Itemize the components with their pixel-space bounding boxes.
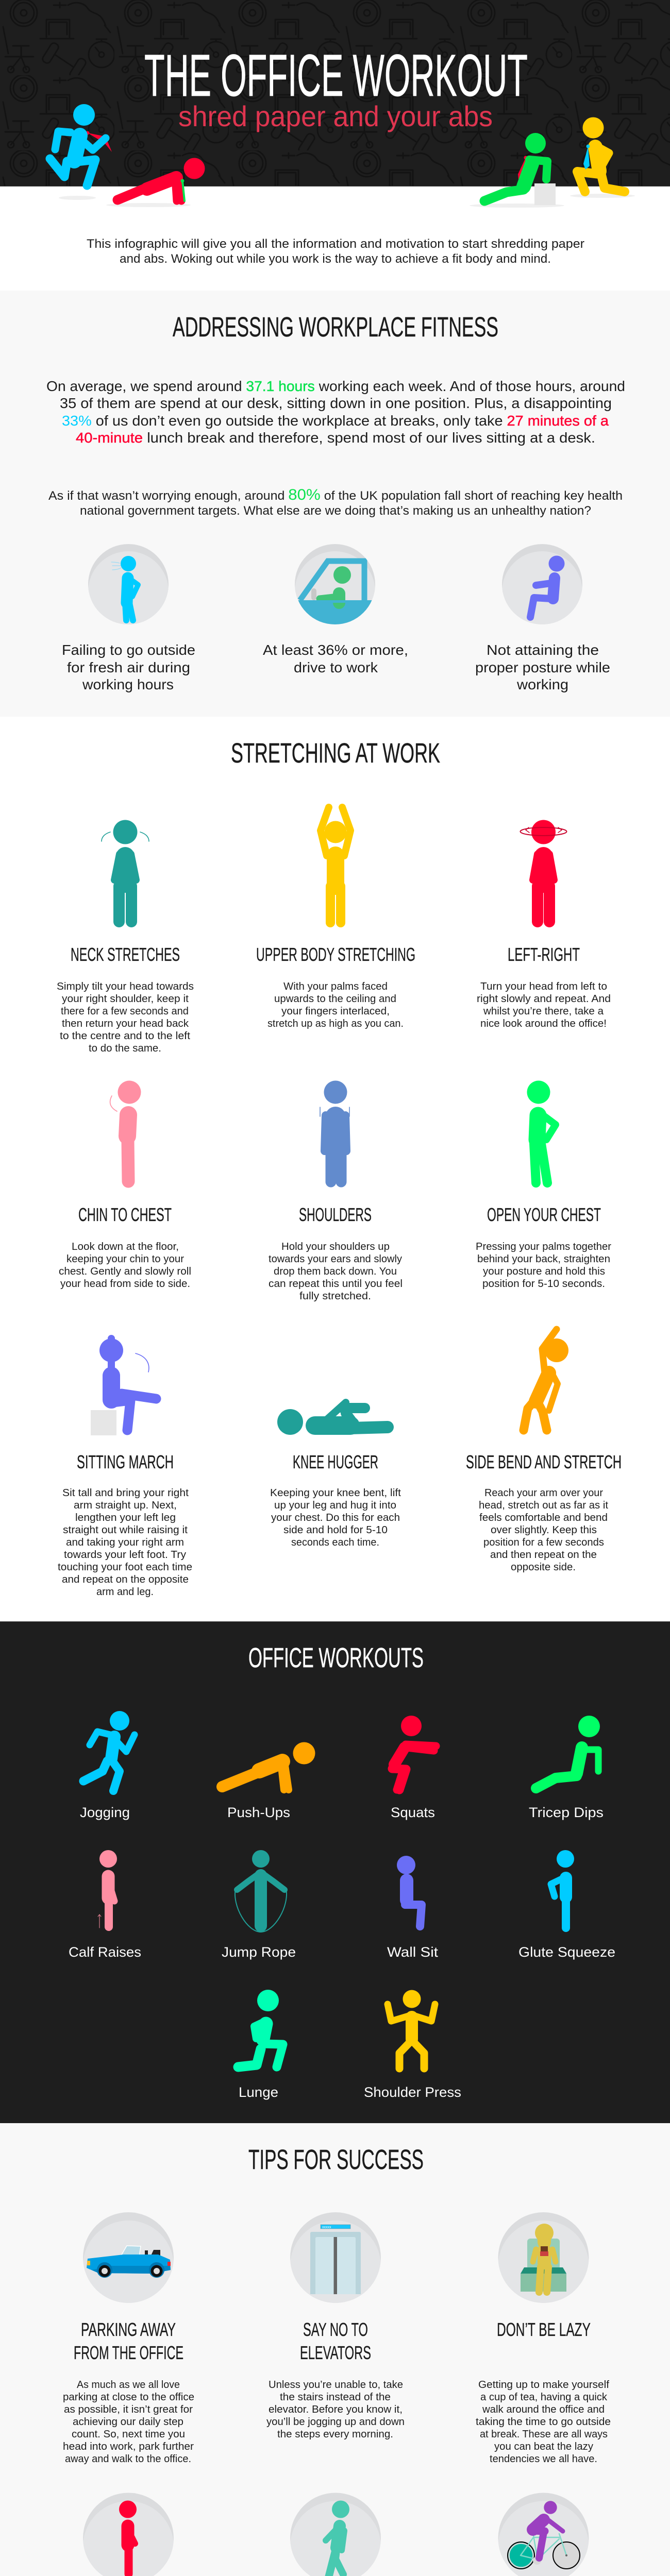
description: Keeping your knee bent, lift [270,1487,401,1499]
caption: drive to work [263,642,408,675]
icon: wall sit [397,1856,422,1926]
description: up your leg and hug it into [274,1500,396,1511]
card: chin to chest [59,1081,191,1290]
description: over slightly. Keep this [491,1524,597,1536]
description: to the centre and to the left [60,1030,190,1042]
card: open your chest [476,1081,611,1290]
icon: open chest figure [527,1081,556,1183]
icon: tricep dips [536,1716,600,1788]
text block: statistics paragraph: 40-minute lunch break and therefore, spend most of our lives sitting at a desk. [76,430,595,446]
description: feels comfortable and bend [479,1512,608,1523]
title: FROM THE OFFICE [74,2342,183,2363]
card: upper body stretching [256,807,415,1029]
description: then return your head back [62,1018,189,1029]
description: towards your ears and slowly [269,1253,402,1265]
caption: posture: Not attaining the [487,642,599,658]
figure: running man [50,104,112,200]
text block: UK population paragraph: national government targets. What else are we doing that’s making us an unhealthy nation? [80,504,591,518]
text block: UK population paragraph: As if that wasn’t worrying enough, around 80% of the UK population fall short of reaching key health [48,486,623,503]
description [59,1241,191,1290]
figure: push-up man [106,158,205,207]
label: Glute Squeeze [518,1944,615,1960]
description: a cup of tea, having a quick [480,2392,608,2403]
title: OPEN YOUR CHEST [487,1204,601,1225]
description [476,1241,611,1290]
card: don't be lazy [476,2212,611,2465]
icon: shoulder press [388,1990,435,2069]
figure: tricep dip man [470,133,564,208]
description: fully stretched. [299,1291,371,1302]
icon: knee hugger figure [277,1402,388,1435]
description: chest. Gently and slowly roll [59,1266,191,1277]
icon: person eating on sofa [498,2212,589,2311]
description: at break. These are all ways [480,2429,608,2440]
description: arm and leg. [96,1586,154,1598]
icon: elevator [290,2212,381,2311]
label: Jump Rope [222,1944,296,1960]
description [267,981,404,1029]
description: Reach your arm over your [484,1487,603,1499]
caption: posture: proper posture while [475,659,610,675]
panel: header banner [0,0,670,208]
text block: statistics paragraph: On average, we spend around 37.1 hours working each week. And of those hours, around [46,378,625,394]
text block: statistics paragraph [46,378,625,446]
description: Turn your head from left to [480,981,607,992]
title: CHIN TO CHEST [78,1204,172,1225]
title: PARKING AWAY [81,2319,176,2340]
icon: blue car [83,2212,174,2311]
title [74,2319,183,2363]
heading: TIPS FOR SUCCESS [248,2144,424,2175]
description: head into work, park further [63,2441,194,2452]
panel: office workouts [0,1621,670,2123]
description: Simply tilt your head towards [57,981,194,992]
caption: failing to go outside: Failing to go outside [62,642,195,658]
label: Jogging [80,1805,130,1820]
icon: glute squeeze [551,1850,574,1928]
card: say no to elevators [266,2212,405,2440]
label: Calf Raises [69,1944,141,1960]
description: parking at close to the office [63,2392,194,2403]
description: lengthen your left leg [75,1512,176,1523]
card: neck stretches [57,820,194,1054]
description: achieving our daily step [73,2416,183,2428]
description: touching your foot each time [58,1562,192,1573]
card: parking away [63,2212,194,2465]
text block: statistics paragraph: 35 of them are spend at our desk, sitting down in one position. Plus, a disappointing [60,395,612,411]
title: UPPER BODY STRETCHING [256,944,415,965]
description: nice look around the office! [480,1018,607,1029]
title: SHOULDERS [299,1204,372,1225]
text block: statistics paragraph: 33% of us don’t even go outside the workplace at breaks, only take 27 minutes of a [62,413,609,429]
icon: neck stretches figure [102,820,149,922]
description: the stairs instead of the [280,2392,391,2403]
icon: failing to go outside [88,544,169,632]
description: to do the same. [89,1043,161,1054]
icon: jump rope [235,1850,287,1932]
description [269,1241,403,1302]
panel: stretching at work [57,738,622,1598]
description: away and walk to the office. [65,2453,191,2465]
icon: cyclist [498,2493,589,2576]
caption: drive to work: At least 36% or more, [263,642,408,658]
description: right slowly and repeat. And [477,993,611,1005]
description: you’ll be jogging up and down [266,2416,405,2428]
card: shoulders [269,1081,403,1302]
figure: lunging man [570,117,635,198]
description: seconds each time. [291,1537,379,1548]
description: head, stretch out as far as it [479,1500,608,1511]
description: your right shoulder, keep it [62,993,189,1005]
description: Getting up to make yourself [478,2379,609,2391]
description: As much as we all love [77,2379,180,2391]
description: your chest. Do this for each [271,1512,400,1523]
description: walk around the office and [482,2404,605,2415]
icon: elevator: xxxxx [322,2226,331,2229]
description: straight out while raising it [63,1524,188,1536]
description: tendencies we all have. [490,2453,597,2465]
description: you can beat the lazy [494,2441,593,2452]
description: Look down at the floor, [72,1241,179,1252]
icon: side bend figure [524,1329,568,1430]
subtitle: shred paper and your abs [178,100,493,132]
heading: OFFICE WORKOUTS [248,1642,424,1673]
description [266,2379,405,2440]
label: Tricep Dips [529,1805,604,1820]
description [63,2379,194,2465]
description: behind your back, straighten [477,1253,610,1265]
description: position for 5-10 seconds. [482,1278,605,1290]
icon: shoulders figure [320,1081,349,1182]
caption: posture [475,642,610,692]
description [479,1487,608,1573]
title: ELEVATORS [300,2342,371,2363]
description: can repeat this until you feel [269,1278,403,1290]
description: keeping your chin to your [66,1253,184,1265]
title: LEFT-RIGHT [508,944,580,965]
panel: addressing workplace fitness [47,317,625,692]
description: and repeat on the opposite [62,1574,189,1585]
icon: lunge [238,1990,283,2067]
text block: introduction [87,237,584,266]
caption: failing to go outside [62,642,195,692]
title [300,2319,371,2363]
description [477,981,611,1029]
panel: tips for success [63,2149,610,2576]
icon: sitting march figure [91,1338,156,1435]
description [476,2379,611,2465]
description: opposite side. [511,1562,576,1573]
text block: introduction: This infographic will give you all the information and motivation to start shredding paper [87,237,584,251]
description: Hold your shoulders up [281,1241,390,1252]
title: SAY NO TO [303,2319,368,2340]
description: side and hold for 5-10 [283,1524,388,1536]
description: drop them back down. You [274,1266,397,1277]
text block: UK population paragraph [48,486,623,518]
description: the steps every morning. [277,2429,393,2440]
label: Lunge [239,2084,278,2100]
description: as possible, it isn’t great for [64,2404,193,2415]
description: there for a few seconds and [61,1006,189,1017]
label: Wall Sit [387,1944,439,1960]
icon: chin to chest figure [110,1081,141,1181]
card: side bend and stretch [466,1329,622,1573]
icon: standing figure [83,2493,174,2576]
description [270,1487,401,1548]
description: count. So, next time you [72,2429,185,2440]
card: standing up straight [83,2493,174,2576]
description [57,981,194,1054]
description: and then repeat on the [490,1549,597,1561]
description: With your palms faced [283,981,388,992]
card: move your legs [290,2493,381,2576]
icon: driving a car [295,544,375,624]
description: and taking your right arm [66,1537,184,1548]
caption: drive to work: drive to work [294,659,378,675]
label: Shoulder Press [364,2084,461,2100]
description: whilst you’re there, take a [483,1006,604,1017]
caption: posture: working [516,676,568,692]
icon: walking figure [290,2493,381,2576]
title: KNEE HUGGER [293,1451,378,1472]
title: NECK STRETCHES [71,944,180,965]
icon: jogging [83,1711,135,1791]
heading: STRETCHING AT WORK [231,738,440,769]
caption: failing to go outside: working hours [82,676,174,692]
description: your fingers interlaced, [281,1006,390,1017]
card: left-right [477,820,611,1029]
icon: calf raises [98,1850,117,1928]
caption: failing to go outside: for fresh air during [67,659,190,675]
description: your posture and hold this [483,1266,605,1277]
description: Pressing your palms together [476,1241,611,1252]
description: taking the time to go outside [476,2416,611,2428]
icon: left-right figure [521,820,567,922]
heading: ADDRESSING WORKPLACE FITNESS [173,312,498,343]
description [58,1487,192,1598]
card: knee hugger [270,1402,401,1548]
description: Sit tall and bring your right [62,1487,189,1499]
title: DON’T BE LAZY [497,2319,591,2340]
description: towards your left foot. Try [64,1549,186,1561]
description: Unless you’re unable to, take [269,2379,403,2391]
label: Push-Ups [227,1805,290,1820]
icon: poor posture [502,544,582,632]
icon: squats [392,1716,436,1790]
description: your head from side to side. [60,1278,190,1290]
icon: upper body figure [321,807,350,923]
card: commute differently [498,2493,589,2576]
description: stretch up as high as you can. [267,1018,404,1029]
label: Squats [391,1805,435,1820]
description: elevator. Before you know it, [269,2404,403,2415]
description: arm straight up. Next, [74,1500,177,1511]
description: upwards to the ceiling and [274,993,396,1005]
description: position for a few seconds [483,1537,604,1548]
card: sitting march [58,1338,192,1598]
title: SITTING MARCH [77,1451,174,1472]
icon: push-ups [222,1742,315,1790]
text block: introduction: and abs. Woking out while you work is the way to achieve a fit body and mind. [120,252,551,266]
